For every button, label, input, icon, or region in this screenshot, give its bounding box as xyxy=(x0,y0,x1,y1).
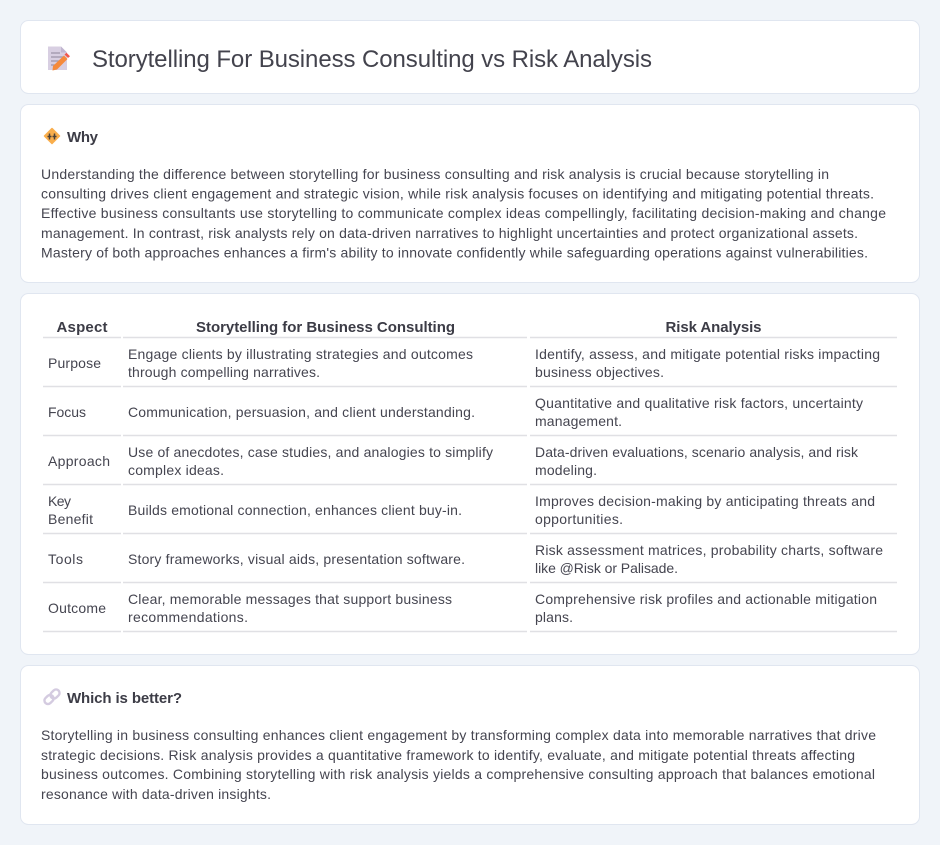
panel: comparison table xyxy=(20,294,920,654)
row: purpose: Identify, assess, and mitigate potential risks impacting xyxy=(535,346,880,362)
panel: title xyxy=(20,20,920,94)
heading: which is better: Which is better? xyxy=(67,690,182,707)
text: why body xyxy=(41,166,886,260)
heading: why: Why xyxy=(67,129,99,146)
text: which is better body: resonance with data-driven insights. xyxy=(41,786,271,802)
icon: memo with pencil xyxy=(48,46,70,70)
row: tools: Risk assessment matrices, probability charts, software xyxy=(535,542,883,558)
row: approach: Data-driven evaluations, scenario analysis, and risk xyxy=(535,444,859,460)
row: key benefit: Benefit xyxy=(48,511,93,527)
row: key benefit: Key xyxy=(48,493,71,509)
text: which is better body: strategic decisions. Risk analysis provides a quantitative framework to identify, evaluate, and mitigate potential threats affecting xyxy=(41,747,855,763)
row: key benefit xyxy=(48,493,875,527)
row: tools xyxy=(48,542,883,576)
table header: Risk Analysis xyxy=(666,319,762,336)
row: outcome: Comprehensive risk profiles and actionable mitigation xyxy=(535,591,877,607)
text: why body: Mastery of both approaches enhances a firm's ability to innovate confidently while safeguarding operations against vulnerabilities. xyxy=(41,244,868,260)
row: outcome: recommendations. xyxy=(128,609,248,625)
text: why body: Understanding the difference between storytelling for business consulting and risk analysis is crucial because storytelling in xyxy=(41,166,829,182)
icon: link xyxy=(43,688,61,706)
row: purpose: Engage clients by illustrating strategies and outcomes xyxy=(128,346,473,362)
row: purpose xyxy=(48,346,880,380)
text: which is better body: business outcomes. Combining storytelling with risk analysis yields a comprehensive consulting approach that balances emotional xyxy=(41,766,875,782)
text: which is better body xyxy=(41,727,876,802)
row: outcome: Clear, memorable messages that support business xyxy=(128,591,452,607)
panel: why xyxy=(20,104,920,282)
row: approach: complex ideas. xyxy=(128,462,224,478)
heading: page title: Storytelling For Business Consulting vs Risk Analysis xyxy=(92,46,652,73)
text: why body: Effective business consultants use storytelling to communicate complex ideas compellingly, facilitating decision-making and change xyxy=(41,205,886,221)
row: key benefit: Improves decision-making by anticipating threats and xyxy=(535,493,875,509)
row: outcome: Outcome xyxy=(48,600,106,616)
row: focus: Focus xyxy=(48,404,86,420)
row: tools: Tools xyxy=(48,551,83,567)
text: why body: consulting drives client engagement and strategic vision, while risk analysis focuses on identifying and mitigating potential threats. xyxy=(41,186,874,202)
row: focus: management. xyxy=(535,413,622,429)
row: tools: Story frameworks, visual aids, presentation software. xyxy=(128,551,465,567)
panel: which is better xyxy=(20,666,920,824)
row: approach: modeling. xyxy=(535,462,597,478)
row: approach: Use of anecdotes, case studies, and analogies to simplify xyxy=(128,444,493,460)
row: purpose: Purpose xyxy=(48,355,101,371)
row: key benefit: opportunities. xyxy=(535,511,623,527)
row: focus xyxy=(48,395,863,429)
row: focus: Quantitative and qualitative risk factors, uncertainty xyxy=(535,395,863,411)
row: purpose: through compelling narratives. xyxy=(128,364,320,380)
icon: warning diamond xyxy=(44,128,60,144)
row: outcome xyxy=(48,591,877,625)
table header: Aspect xyxy=(56,319,108,336)
row: outcome: plans. xyxy=(535,609,573,625)
table header: Storytelling for Business Consulting xyxy=(196,319,455,336)
table header xyxy=(56,319,762,336)
text: why body: management. In contrast, risk analysts rely on data-driven narratives to highlight uncertainties and protect organizational assets. xyxy=(41,225,858,241)
row: approach: Approach xyxy=(48,453,110,469)
row: focus: Communication, persuasion, and client understanding. xyxy=(128,404,475,420)
row: approach xyxy=(48,444,859,478)
text: which is better body: Storytelling in business consulting enhances client engagement by transforming complex data into memorable narratives that drive xyxy=(41,727,876,743)
row: tools: like @Risk or Palisade. xyxy=(535,560,678,576)
row: key benefit: Builds emotional connection, enhances client buy-in. xyxy=(128,502,462,518)
row: purpose: business objectives. xyxy=(535,364,664,380)
